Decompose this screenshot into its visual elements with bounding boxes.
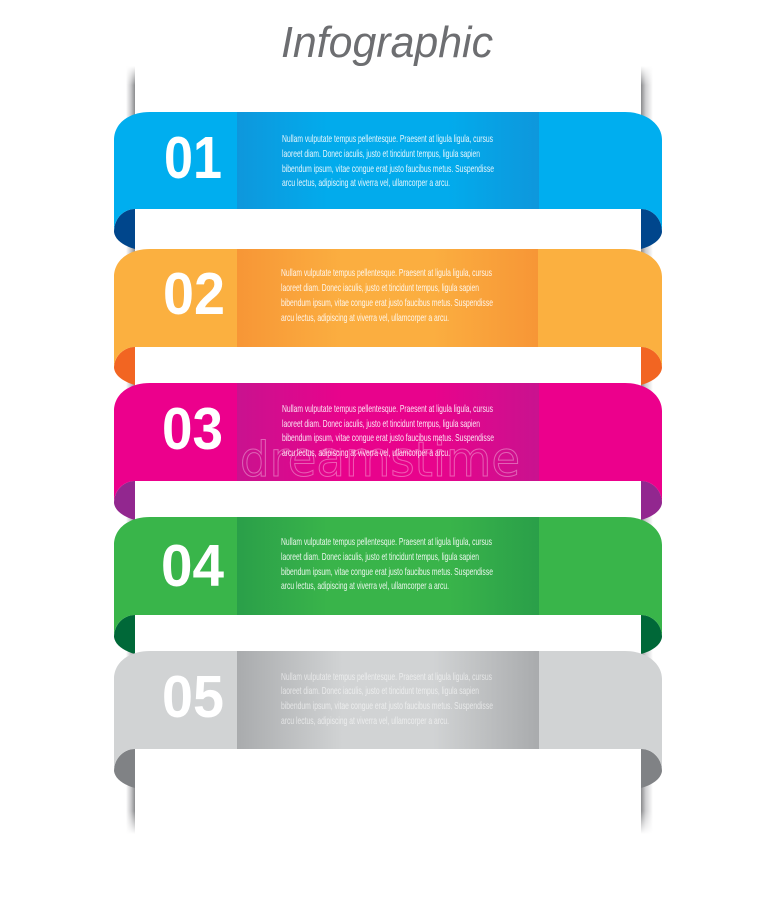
text block 05: Nullam vulputate tempus pellentesque. Praesent at ligula ligula, cursus [281,671,492,683]
band 05 [114,651,662,771]
band 02 [114,249,662,368]
text block 03: bibendum ipsum, vitae congue erat justo faucibus metus. Suspendisse [282,432,494,444]
text block 01: Nullam vulputate tempus pellentesque. Praesent at ligula ligula, cursus [282,133,493,145]
text block 04: Nullam vulputate tempus pellentesque. Praesent at ligula ligula, cursus [281,536,492,548]
title: Infographic [281,18,493,67]
text block 02: bibendum ipsum, vitae congue erat justo faucibus metus. Suspendisse [281,297,493,309]
text block 02: Nullam vulputate tempus pellentesque. Praesent at ligula ligula, cursus [281,267,492,279]
number 04: 04 [161,533,224,599]
centre panel 02 [237,249,538,347]
left fold 05 [114,749,135,788]
right fold 05 [641,749,662,788]
text block 02 [281,267,493,324]
text block 04: bibendum ipsum, vitae congue erat justo faucibus metus. Suspendisse [281,566,493,578]
right fold 02 [641,347,662,385]
text block 01 [282,133,494,189]
number 05: 05 [162,664,224,730]
centre panel 05 [237,651,539,749]
text block 05 [281,671,493,727]
text block 05: laoreet diam. Donec iaculis, justo et tincidunt tempus, ligula sapien [281,685,479,697]
text block 05: arcu lectus, adipiscing at viverra vel, ullamcorper a arcu. [281,715,449,727]
number 01: 01 [164,125,222,191]
text block 03 [282,403,494,459]
ribbon 03 magenta [114,383,662,520]
text block 04: arcu lectus, adipiscing at viverra vel, ullamcorper a arcu. [281,580,449,592]
number 03: 03 [162,396,223,462]
number 02: 02 [163,261,225,327]
text block 04: laoreet diam. Donec iaculis, justo et tincidunt tempus, ligula sapien [281,551,479,563]
text block 03: Nullam vulputate tempus pellentesque. Praesent at ligula ligula, cursus [282,403,493,415]
ribbon 02 orange [114,249,662,385]
centre panel 01 [237,112,539,209]
left fold 02 [114,347,135,385]
band 03 [114,383,662,503]
left fold 03 [114,481,135,520]
text block 01: laoreet diam. Donec iaculis, justo et tincidunt tempus, ligula sapien [282,148,480,160]
text block 03: laoreet diam. Donec iaculis, justo et tincidunt tempus, ligula sapien [282,418,480,430]
left page edge shadow [126,66,135,834]
ribbon 04 green [114,517,662,654]
text block 02: laoreet diam. Donec iaculis, justo et tincidunt tempus, ligula sapien [281,282,479,294]
band 01 [114,112,662,232]
text block 05: bibendum ipsum, vitae congue erat justo faucibus metus. Suspendisse [281,700,493,712]
centre panel 04 [237,517,539,615]
text block 04 [281,536,493,592]
left fold 04 [114,615,135,654]
watermark: dreamstime [240,432,520,488]
text block 03: arcu lectus, adipiscing at viverra vel, ullamcorper a arcu. [282,447,450,459]
centre panel 03 [237,383,539,481]
right fold 01 [641,209,662,249]
right fold 03 [641,481,662,520]
ribbon 01 blue [114,112,662,249]
left fold 01 [114,209,135,249]
ribbon 05 grey [114,651,662,788]
text block 01: arcu lectus, adipiscing at viverra vel, ullamcorper a arcu. [282,177,450,189]
text block 01: bibendum ipsum, vitae congue erat justo faucibus metus. Suspendisse [282,163,494,175]
right page edge shadow [641,66,653,834]
band 04 [114,517,662,637]
right fold 04 [641,615,662,654]
text block 02: arcu lectus, adipiscing at viverra vel, ullamcorper a arcu. [281,312,449,324]
